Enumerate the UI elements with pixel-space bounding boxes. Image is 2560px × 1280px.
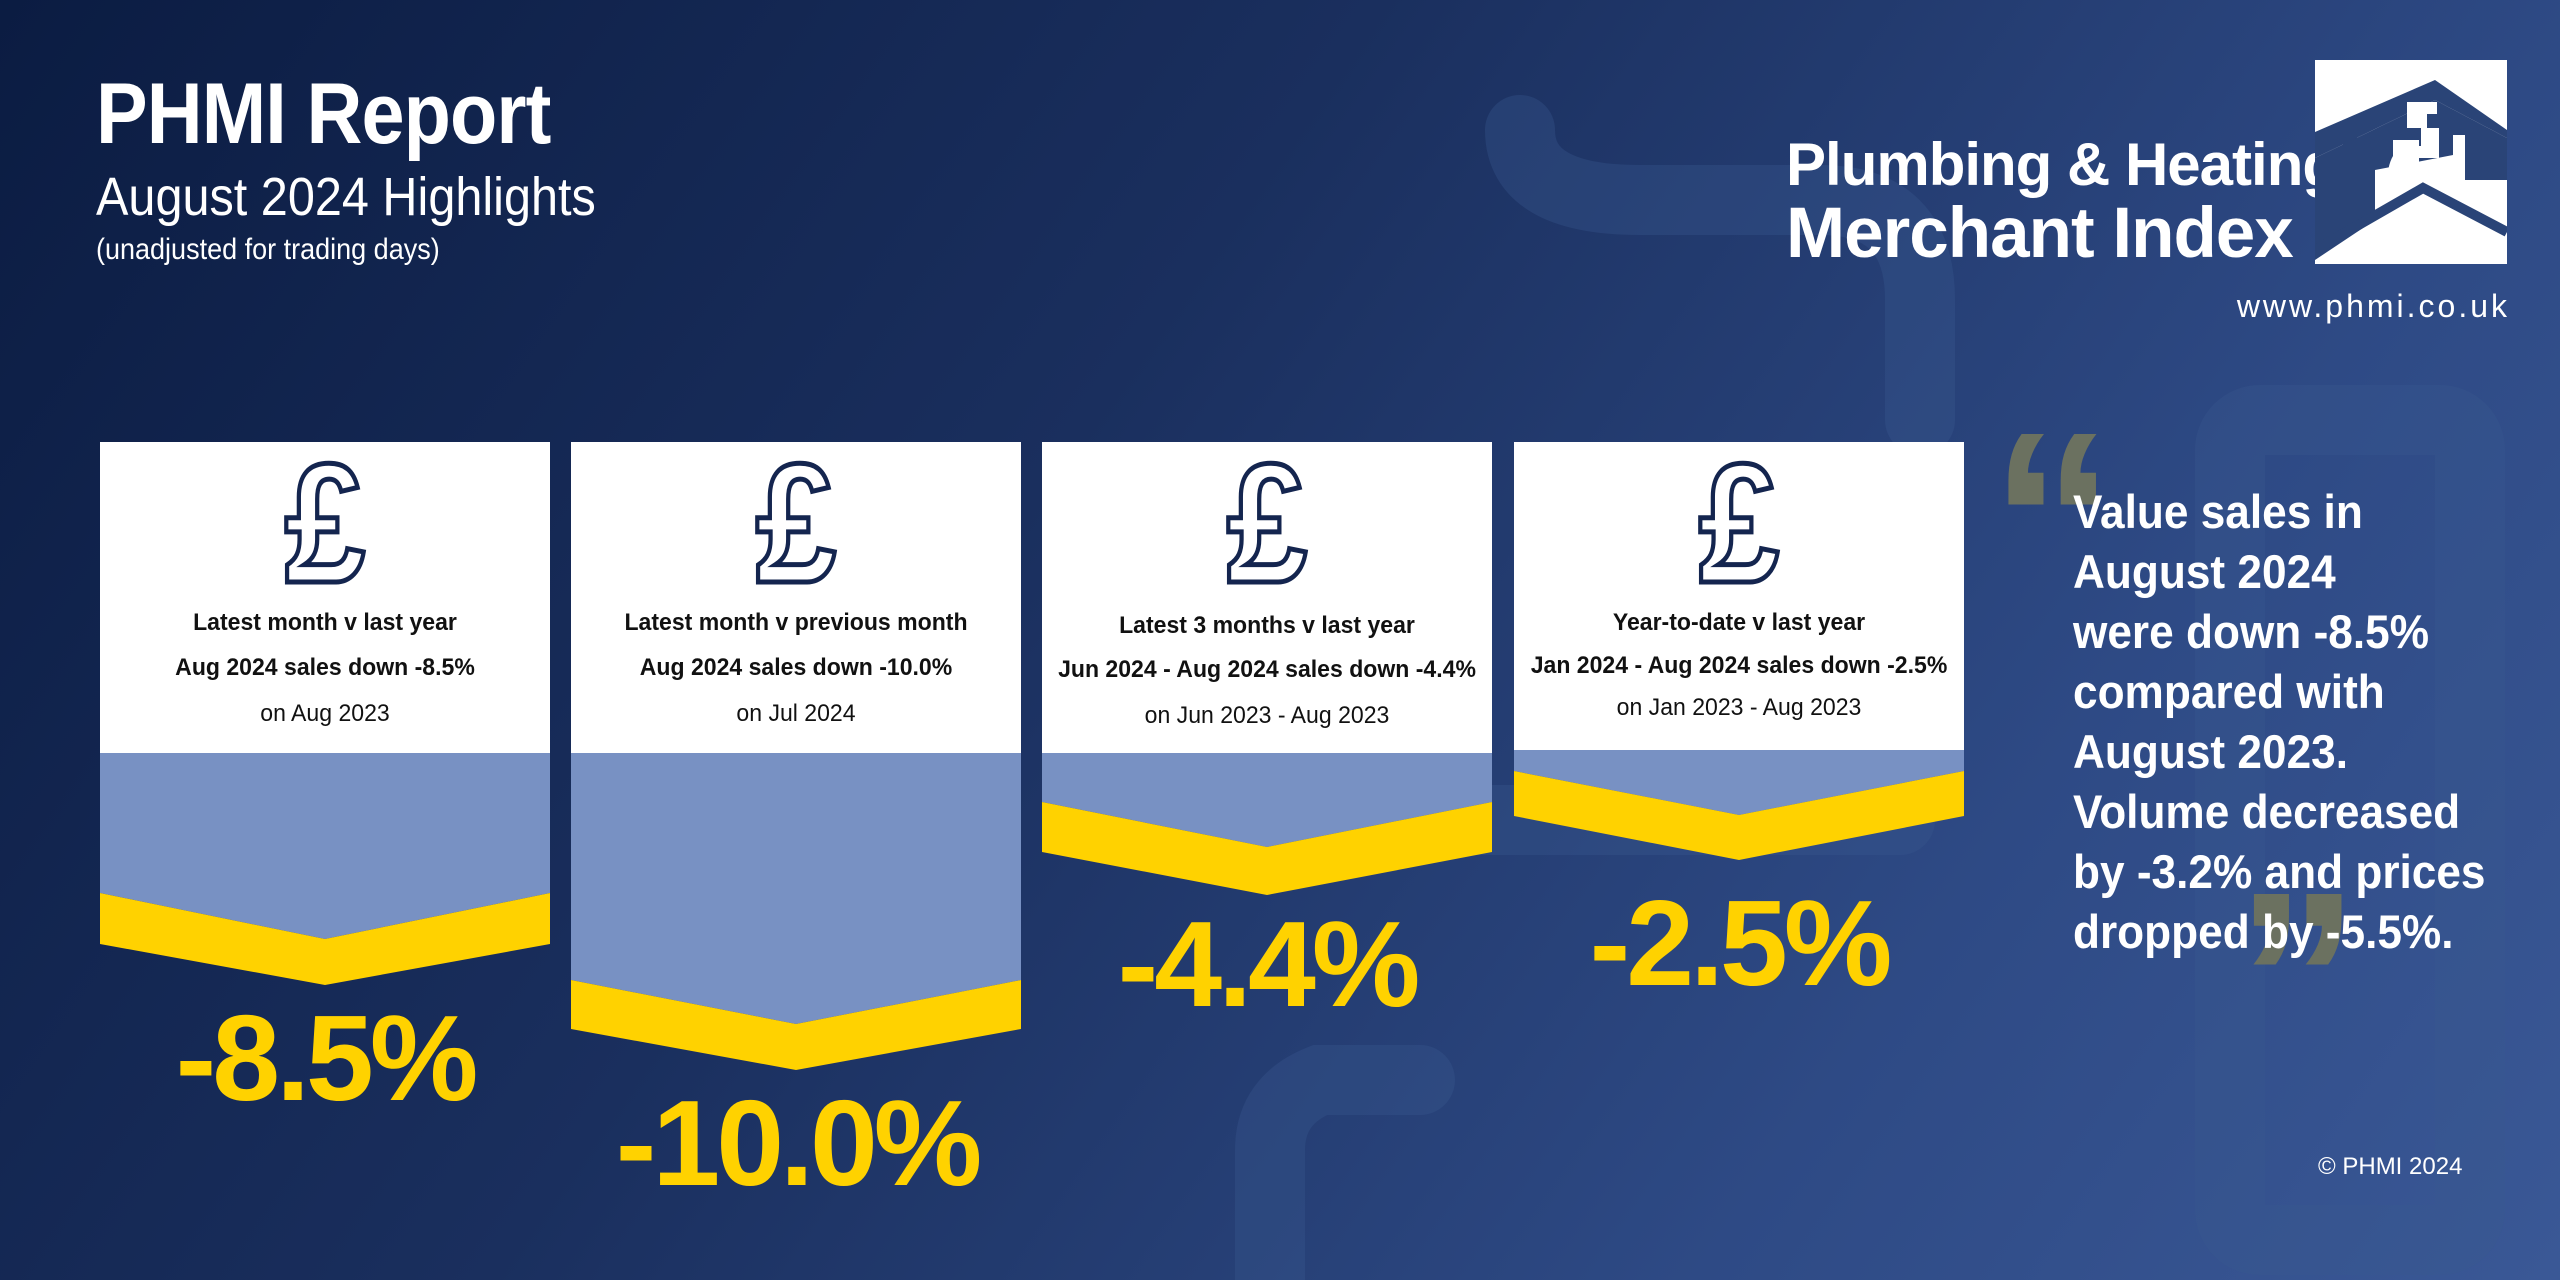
text: on Jul 2024	[736, 700, 856, 727]
title: August 2024 Highlights	[96, 167, 596, 227]
text: on Jun 2023 - Aug 2023	[1145, 702, 1389, 729]
card 3 text: Latest 3 months v last year	[1119, 612, 1415, 639]
number 3: -4.4%	[1118, 896, 1416, 1032]
copyright: © PHMI 2024	[2318, 1153, 2462, 1180]
quote text: were down -8.5%	[2073, 605, 2429, 658]
title	[96, 66, 596, 266]
number 2: -10.0%	[616, 1075, 978, 1211]
logo text: Plumbing & Heating	[1786, 131, 2338, 198]
icon: pound: £	[285, 429, 365, 619]
quote text: August 2024	[2073, 545, 2336, 598]
title: PHMI Report	[96, 66, 550, 162]
logo text: Merchant Index	[1786, 194, 2293, 273]
text: on Jan 2023 - Aug 2023	[1617, 694, 1861, 721]
card 2	[571, 429, 1021, 1070]
text: Jan 2024 - Aug 2024 sales down -2.5%	[1531, 652, 1947, 679]
text: Aug 2024 sales down -10.0%	[640, 654, 952, 681]
number 1: -8.5%	[176, 990, 474, 1126]
text: Jun 2024 - Aug 2024 sales down -4.4%	[1058, 656, 1476, 683]
card 4 text: Year-to-date v last year	[1613, 609, 1865, 636]
card 3	[1042, 429, 1492, 895]
quote text: Volume decreased	[2073, 785, 2460, 838]
icon: pound: £	[1227, 429, 1307, 619]
card 1	[100, 429, 550, 985]
text: on Aug 2023	[260, 700, 390, 727]
quote mark open: “	[1990, 380, 2115, 659]
quote text: August 2023.	[2073, 725, 2348, 778]
logo icon: house and tap	[2315, 60, 2507, 264]
quote mark close: ”	[2235, 840, 2360, 1119]
quote text: by -3.2% and prices	[2073, 845, 2486, 898]
title: (unadjusted for trading days)	[96, 233, 440, 266]
icon: pound: £	[756, 429, 836, 619]
number 4: -2.5%	[1590, 875, 1888, 1011]
text: Aug 2024 sales down -8.5%	[175, 654, 475, 681]
website: www.phmi.co.uk	[2237, 288, 2510, 324]
card 4	[1514, 429, 1964, 860]
card 2 text: Latest month v previous month	[624, 609, 968, 636]
quote text: Value sales in	[2073, 485, 2363, 538]
logo text	[1786, 131, 2338, 273]
quote text: dropped by -5.5%.	[2073, 905, 2453, 958]
quote text	[2072, 485, 2486, 958]
icon: pound: £	[1699, 429, 1779, 619]
logo	[1786, 60, 2510, 324]
card 1 text: Latest month v last year	[193, 609, 457, 636]
quote text: compared with	[2073, 665, 2385, 718]
